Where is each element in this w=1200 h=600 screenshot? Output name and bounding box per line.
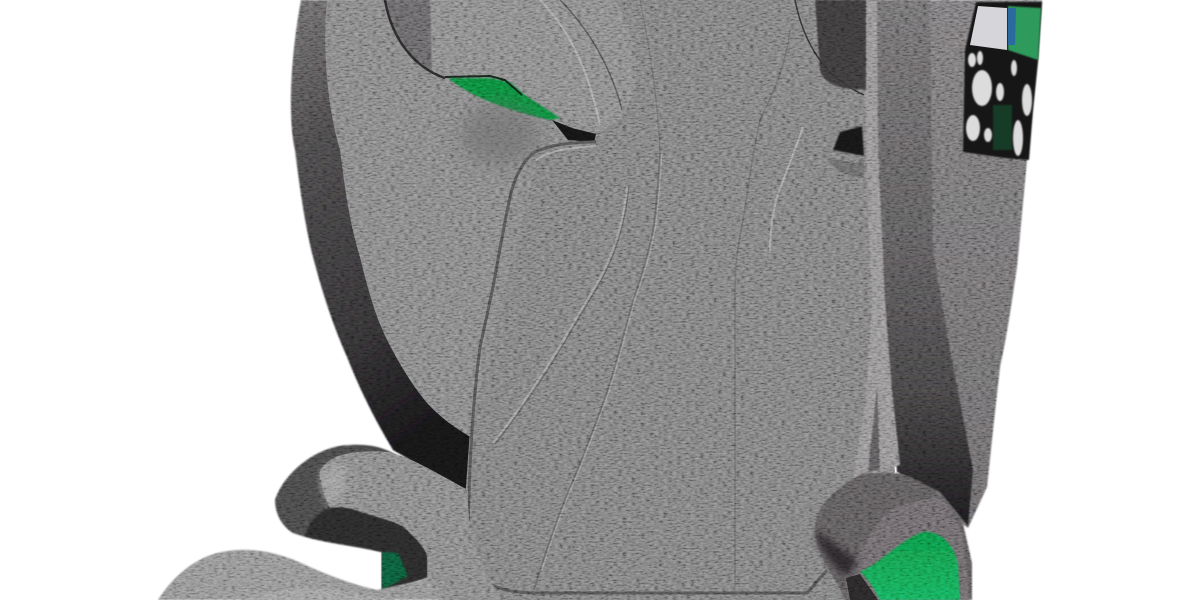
right headrest dark side — [815, 0, 866, 90]
seat pad outline — [468, 142, 827, 593]
armrest green — [860, 532, 960, 600]
armrest dark outer — [275, 445, 440, 592]
soft shading overlays — [460, 105, 540, 165]
left back shell band — [291, 0, 500, 495]
armrest outer band — [815, 473, 972, 600]
armrest green — [382, 552, 408, 590]
photo: grey child car booster seat — [158, 0, 1044, 600]
armrest shadow — [815, 530, 858, 578]
left back panel — [325, 0, 600, 440]
armrest base dark — [846, 574, 878, 600]
right back shell — [866, 0, 1042, 528]
light edge strip between centre and shell — [853, 0, 900, 480]
right shell dark inner band — [872, 0, 973, 526]
label photo blobs — [966, 51, 1032, 156]
label green panel — [1008, 6, 1041, 60]
right side slot — [827, 126, 864, 178]
label dark green patch — [993, 105, 1012, 150]
headrest green strip — [445, 76, 596, 142]
fabric texture — [150, 0, 1050, 600]
armrest recess — [305, 507, 427, 592]
left armrest — [275, 445, 505, 600]
centre column — [465, 0, 895, 600]
armrest inner band — [843, 498, 970, 600]
safety label on right shell — [963, 2, 1042, 160]
front seat cushion — [158, 550, 445, 600]
right armrest — [815, 473, 972, 600]
label white panel — [970, 6, 1007, 50]
seams on centre column — [493, 0, 864, 590]
armrest light top — [319, 451, 505, 600]
headrest left wing — [385, 0, 636, 132]
